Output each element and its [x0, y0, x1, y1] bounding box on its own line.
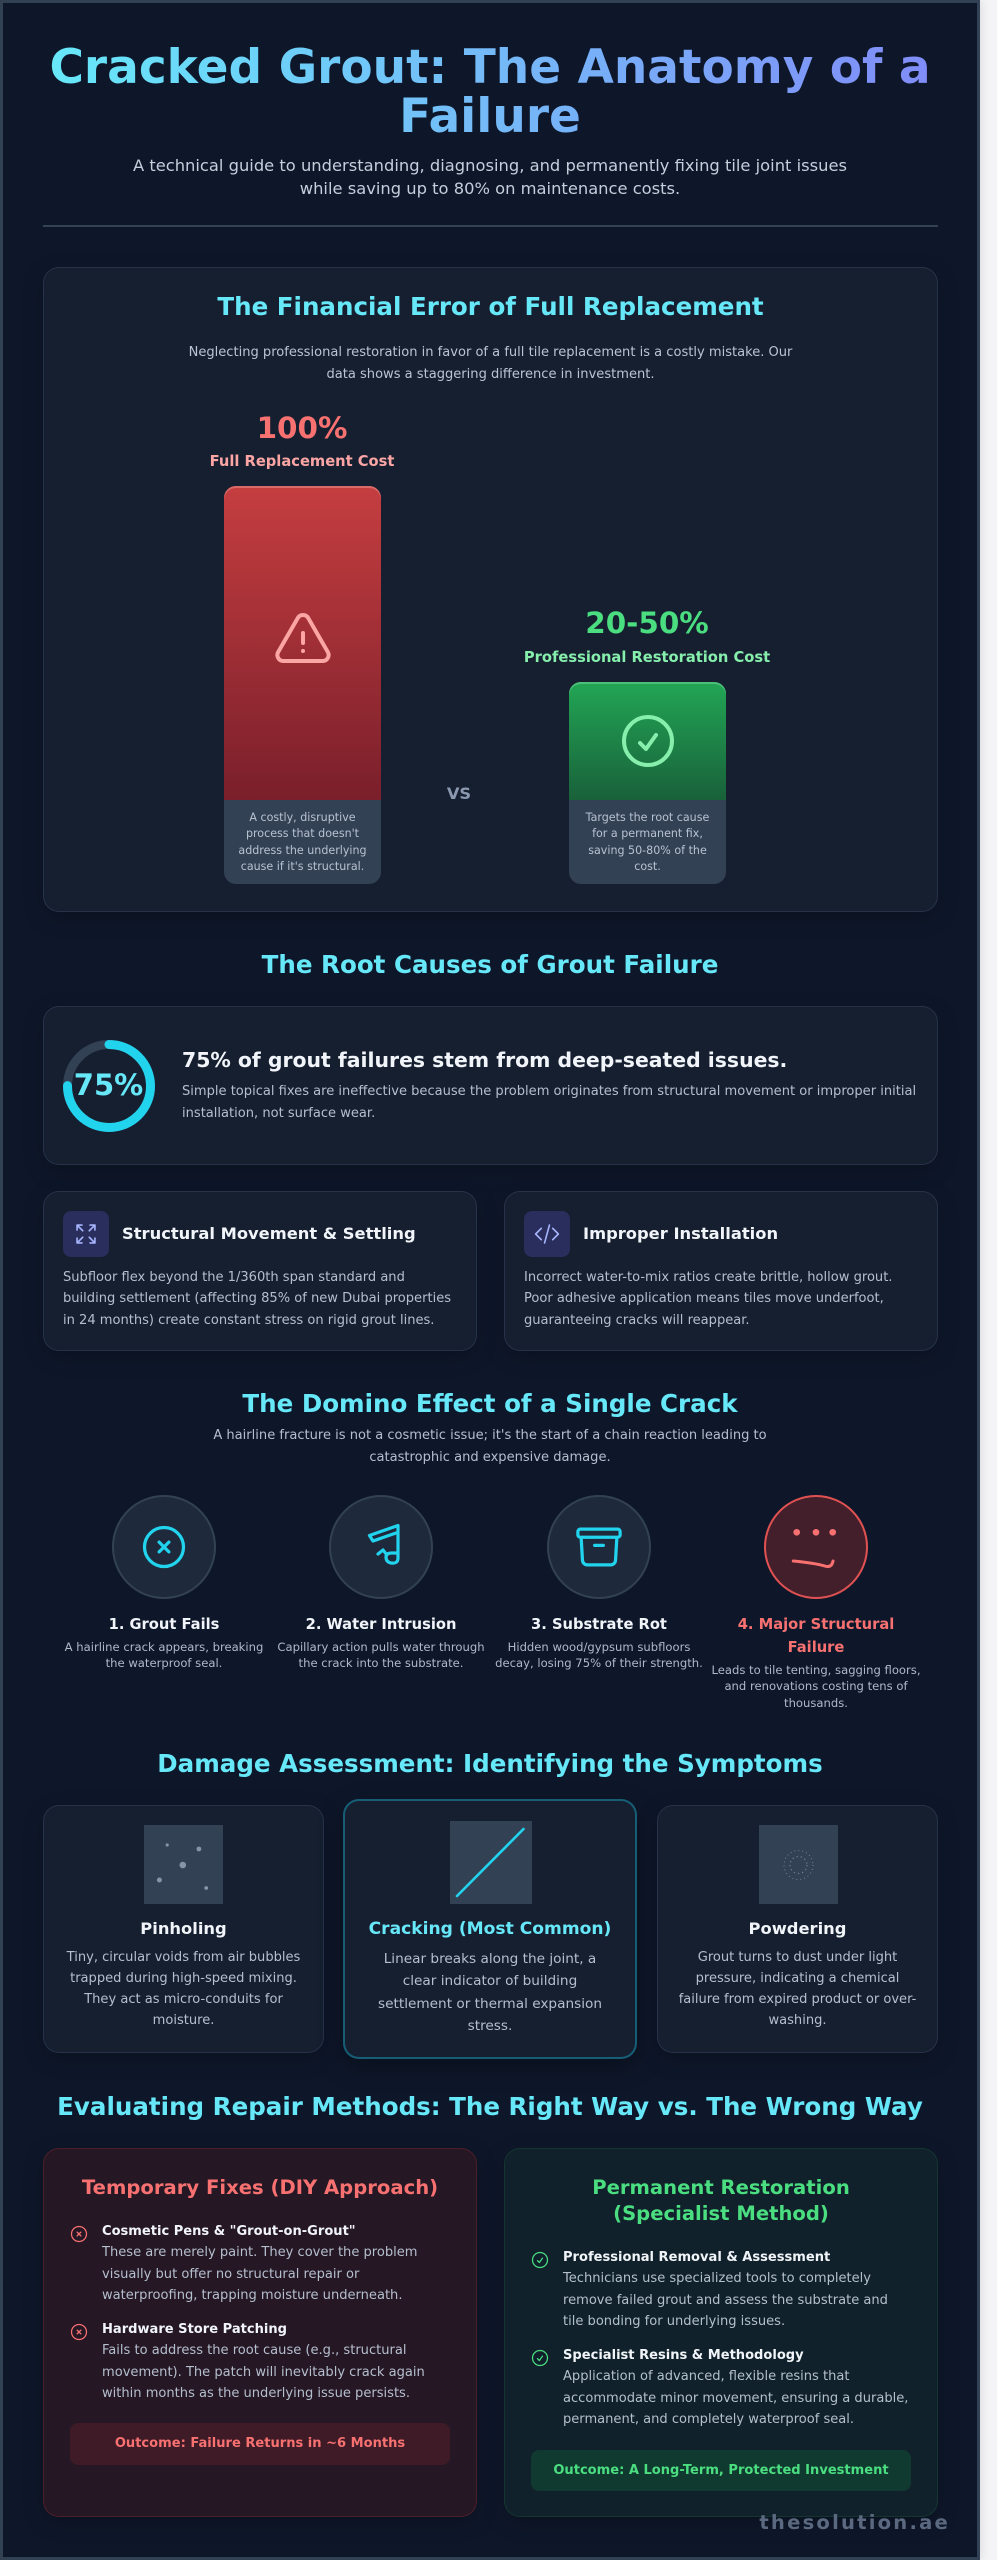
text: structural movement: building settlement (affecting 85% of new Dubai properties	[63, 1291, 451, 1306]
caption: restoration: Targets the root cause	[586, 811, 709, 824]
caption: full replacement: cause if it's structural.	[241, 860, 364, 873]
caption: restoration: for a permanent fix,	[592, 827, 703, 840]
stat: 100%: 100%	[257, 411, 347, 445]
title: Cracked Grout: The Anatomy of a	[49, 40, 931, 95]
text: pinholing: moisture.	[153, 2013, 214, 2028]
text: hardware store patching: Fails to address the root cause (e.g., structural	[102, 2343, 406, 2358]
illustration: crack	[450, 1821, 532, 1904]
bar: red cost bar	[224, 486, 381, 800]
callout: lasting outcome: Outcome: A Long-Term, Protected Investment	[553, 2463, 889, 2478]
text: cosmetic pens: These are merely paint. They cover the problem	[102, 2245, 418, 2260]
text: step 4: thousands.	[784, 1696, 848, 1710]
chart: 75% ring	[63, 1040, 155, 1132]
stat: 20-50%: 20-50%	[585, 606, 709, 640]
text: cosmetic pens: waterproofing, trapping moisture underneath.	[102, 2288, 402, 2303]
label: specialist resins: Specialist Resins & Methodology	[563, 2348, 804, 2363]
panel: cracking	[343, 1799, 637, 2059]
item: professional removal	[532, 2250, 888, 2329]
callout: failure outcome: Outcome: Failure Returns in ~6 Months	[115, 2436, 405, 2451]
heading: permanent restoration	[592, 2176, 850, 2225]
label: step 4: Failure	[788, 1639, 844, 1656]
text: 75% explanation: installation, not surface wear.	[182, 1106, 375, 1120]
text: specialist resins: permanent, and completely waterproof seal.	[563, 2412, 854, 2427]
text: step 4: and renovations costing tens of	[724, 1679, 908, 1693]
text: cracking: clear indicator of building	[403, 1973, 577, 1989]
text: professional removal: Technicians use specialized tools to completely	[563, 2271, 871, 2286]
text: step 1: A hairline crack appears, breaking	[65, 1640, 263, 1654]
icon: check circle	[532, 2350, 548, 2366]
text: pinholing: trapped during high-speed mixing.	[70, 1971, 297, 1986]
text: step 1	[64, 1640, 263, 1670]
heading: financial error: The Financial Error of Full Replacement	[217, 292, 764, 321]
text: pinholing: They act as micro-conduits for	[84, 1992, 283, 2007]
text: specialist resins: accommodate minor movement, ensuring a durable,	[563, 2390, 908, 2406]
label: full replacement cost: Full Replacement Cost	[210, 453, 394, 470]
icon: warning triangle	[275, 613, 331, 663]
callout: lasting outcome	[531, 2450, 911, 2491]
heading: temporary fixes: Temporary Fixes (DIY Approach)	[82, 2176, 438, 2199]
bar: green cost bar	[569, 682, 726, 800]
heading: permanent restoration: (Specialist Method)	[613, 2202, 829, 2225]
label: step 2: 2. Water Intrusion	[306, 1616, 456, 1633]
step 3: substrate rot	[495, 1495, 703, 1670]
label: cosmetic pens: Cosmetic Pens & "Grout-on-Grout"	[102, 2224, 356, 2239]
caption: restoration: cost.	[634, 860, 661, 873]
subtitle	[133, 156, 847, 198]
text: powdering: pressure, indicating a chemical	[696, 1971, 899, 1986]
icon: check circle	[532, 2252, 548, 2268]
text: cosmetic pens	[102, 2245, 418, 2303]
text: powdering: washing.	[768, 2013, 827, 2028]
text: improper installation	[524, 1270, 892, 1328]
bar column: professional restoration	[524, 606, 770, 884]
panel: 75% stat	[43, 1006, 938, 1165]
icon: check circle	[622, 715, 674, 767]
panel: temporary fixes	[43, 2148, 477, 2517]
text: step 2: Capillary action pulls water through	[277, 1640, 485, 1654]
watermark: thesolution.ae	[759, 2511, 950, 2534]
text: step 3: decay, losing 75% of their strength.	[495, 1656, 703, 1670]
heading: pinholing: Pinholing	[140, 1919, 227, 1938]
heading: 75% statement: 75% of grout failures stem from deep-seated issues.	[182, 1048, 787, 1072]
callout: failure outcome	[70, 2423, 450, 2465]
text: hardware store patching: movement). The patch will inevitably crack again	[102, 2364, 425, 2380]
caption: full replacement: A costly, disruptive	[249, 811, 356, 824]
text: step 3	[495, 1640, 703, 1670]
icon: x circle	[70, 2324, 88, 2340]
text: step 4	[711, 1663, 921, 1710]
heading: domino effect: The Domino Effect of a Single Crack	[242, 1389, 738, 1418]
icon: archive box	[547, 1495, 651, 1599]
item: hardware store patching	[70, 2322, 425, 2401]
text: 75% explanation: Simple topical fixes are ineffective because the problem originates from structural movement or improper initial	[182, 1084, 916, 1099]
text: cracking: stress.	[468, 2018, 512, 2034]
heading: improper installation: Improper Installation	[583, 1224, 778, 1243]
panel: powdering	[657, 1805, 938, 2053]
text: step 2	[277, 1640, 485, 1670]
panel: improper installation	[504, 1191, 938, 1351]
text: step 2: the crack into the substrate.	[299, 1656, 463, 1670]
text: specialist resins: Application of advanced, flexible resins that	[563, 2369, 849, 2384]
step 4: major structural failure	[711, 1495, 921, 1710]
text: specialist resins	[563, 2369, 908, 2427]
label: step 4	[738, 1616, 894, 1656]
subtitle: while saving up to 80% on maintenance costs.	[300, 179, 680, 198]
text: financial intro: data shows a staggering difference in investment.	[326, 367, 655, 382]
text: hardware store patching: within months as the underlying issue persists.	[102, 2386, 410, 2401]
title: Failure	[399, 88, 581, 144]
step 1: grout fails	[64, 1495, 263, 1670]
icon: x circle	[112, 1495, 216, 1599]
heading: permanent restoration: Permanent Restoration	[592, 2176, 850, 2199]
label: versus: VS	[447, 784, 471, 803]
text: domino intro: A hairline fracture is not a cosmetic issue; it's the start of a chain reaction leading to	[213, 1428, 767, 1443]
heading: root causes: The Root Causes of Grout Failure	[262, 950, 718, 979]
text: professional removal: remove failed grout and assess the substrate and	[563, 2292, 888, 2308]
text: professional removal: tile bonding for underlying issues.	[563, 2314, 785, 2329]
text: step 4: Leads to tile tenting, sagging floors,	[711, 1663, 921, 1677]
panel: pinholing	[43, 1805, 324, 2053]
text: structural movement: in 24 months) create constant stress on rigid grout lines.	[63, 1312, 434, 1328]
caption: full replacement: address the underlying	[238, 844, 367, 857]
label: restoration cost: Professional Restoration Cost	[524, 649, 770, 666]
text: financial intro	[189, 345, 792, 382]
text: step 3: Hidden wood/gypsum subfloors	[508, 1640, 690, 1654]
text: pinholing: Tiny, circular voids from air bubbles	[67, 1950, 300, 1964]
text: powdering: Grout turns to dust under light	[698, 1950, 897, 1964]
panel: permanent restoration	[504, 2148, 938, 2517]
caption: restoration	[569, 800, 726, 884]
chart: 75% ring: 75%	[74, 1068, 143, 1102]
label: step 3: 3. Substrate Rot	[531, 1616, 667, 1633]
caption: restoration: saving 50-80% of the	[588, 844, 707, 857]
label: step 1: 1. Grout Fails	[109, 1616, 219, 1633]
text: domino intro	[213, 1428, 767, 1465]
text: improper installation: Poor adhesive application means tiles move underfoot,	[524, 1291, 884, 1306]
text: structural movement: Subfloor flex beyond the 1/360th span standard and	[63, 1270, 405, 1284]
heading: structural movement: Structural Movement & Settling	[122, 1224, 416, 1243]
text: cosmetic pens: visually but offer no structural repair or	[102, 2266, 359, 2282]
text: domino intro: catastrophic and expensive damage.	[369, 1450, 611, 1465]
panel: financial error	[43, 267, 938, 912]
text: cracking: Linear breaks along the joint, a	[384, 1951, 596, 1967]
title	[0, 44, 980, 141]
text: hardware store patching	[102, 2343, 425, 2401]
text: pinholing	[66, 1950, 300, 2028]
text: cracking	[378, 1951, 602, 2034]
icon: damaged face	[764, 1495, 868, 1599]
icon: x circle	[70, 2226, 88, 2242]
heading: powdering: Powdering	[749, 1919, 846, 1938]
illustration: powder	[759, 1825, 838, 1904]
text: cracking: settlement or thermal expansion	[378, 1996, 602, 2012]
subtitle: A technical guide to understanding, diagnosing, and permanently fixing tile joint issues	[133, 156, 847, 175]
bar column: full replacement	[210, 411, 394, 884]
label: step 4: 4. Major Structural	[738, 1616, 894, 1633]
heading: repair methods: Evaluating Repair Methods: The Right Way vs. The Wrong Way	[57, 2092, 923, 2121]
item: cosmetic pens	[70, 2224, 418, 2303]
illustration: pinholes	[144, 1825, 223, 1904]
icon: code brackets	[524, 1211, 570, 1257]
item: specialist resins	[532, 2348, 908, 2427]
icon: arrows out	[63, 1211, 109, 1257]
text: structural movement	[63, 1270, 451, 1328]
caption: full replacement: process that doesn't	[246, 827, 359, 840]
label: hardware store patching: Hardware Store Patching	[102, 2322, 287, 2337]
text: powdering: failure from expired product or over-	[679, 1992, 916, 2007]
step 2: water intrusion	[277, 1495, 485, 1670]
caption: full replacement	[224, 800, 381, 884]
text: improper installation: Incorrect water-to-mix ratios create brittle, hollow grout.	[524, 1270, 892, 1284]
text: step 1: the waterproof seal.	[106, 1656, 222, 1670]
icon: water intrusion	[329, 1495, 433, 1599]
label: professional removal: Professional Removal & Assessment	[563, 2250, 830, 2265]
text: improper installation: guaranteeing cracks will reappear.	[524, 1312, 750, 1328]
heading: damage assessment: Damage Assessment: Identifying the Symptoms	[157, 1749, 823, 1778]
text: financial intro: Neglecting professional restoration in favor of a full tile replacement is a costly mistake. Our	[189, 345, 792, 360]
text: powdering	[679, 1950, 916, 2028]
text: 75% explanation	[182, 1084, 916, 1120]
text: professional removal	[562, 2271, 888, 2329]
heading: cracking: Cracking (Most Common)	[369, 1918, 611, 1938]
panel: structural movement	[43, 1191, 477, 1351]
